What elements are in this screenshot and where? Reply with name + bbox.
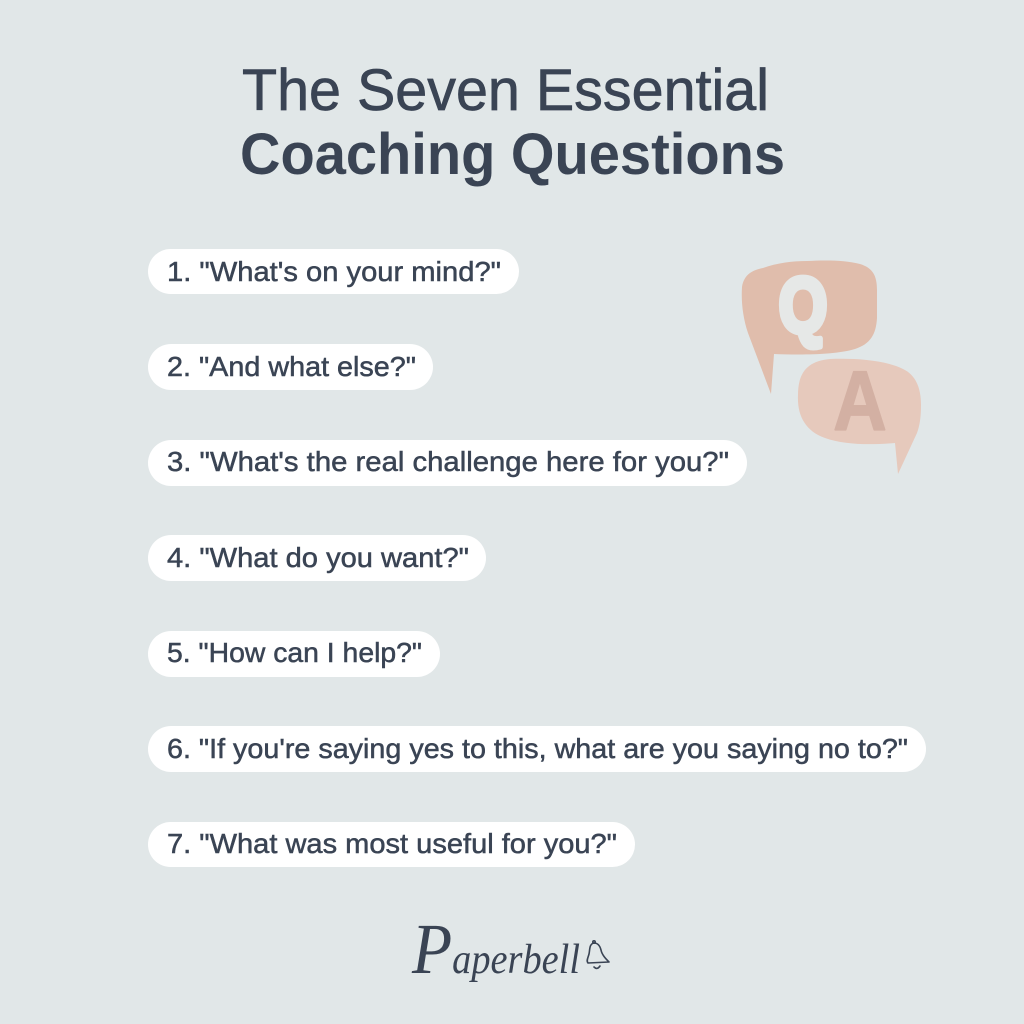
- question 2: 2. "And what else?": [167, 351, 416, 382]
- icon: A bubble: [798, 353, 921, 474]
- icon: Q bubble: [742, 260, 877, 394]
- question 1: [148, 249, 519, 294]
- icon: Q and A speech bubbles: [742, 260, 921, 474]
- title: [240, 58, 785, 187]
- question 1: 1. "What's on your mind?": [167, 256, 501, 287]
- question 6: 6. "If you're saying yes to this, what are you saying no to?": [167, 733, 908, 764]
- question list: [148, 249, 926, 867]
- question 4: [148, 535, 486, 581]
- title: Coaching Questions: [240, 122, 785, 187]
- title: The Seven Essential: [242, 58, 769, 123]
- question 7: 7. "What was most useful for you?": [167, 828, 617, 859]
- icon: A bubble: A: [833, 353, 887, 448]
- question 7: [148, 822, 635, 867]
- logo: Paperbell: Paperbell: [411, 909, 580, 989]
- question 3: 3. "What's the real challenge here for you?": [167, 446, 729, 477]
- icon: Q bubble: Q: [779, 261, 827, 349]
- question 4: 4. "What do you want?": [167, 542, 469, 573]
- question 2: [148, 344, 433, 390]
- icon: bell: [587, 941, 609, 968]
- question 6: [148, 726, 926, 772]
- question 5: [148, 631, 440, 677]
- question 5: 5. "How can I help?": [167, 637, 422, 668]
- question 3: [148, 440, 747, 486]
